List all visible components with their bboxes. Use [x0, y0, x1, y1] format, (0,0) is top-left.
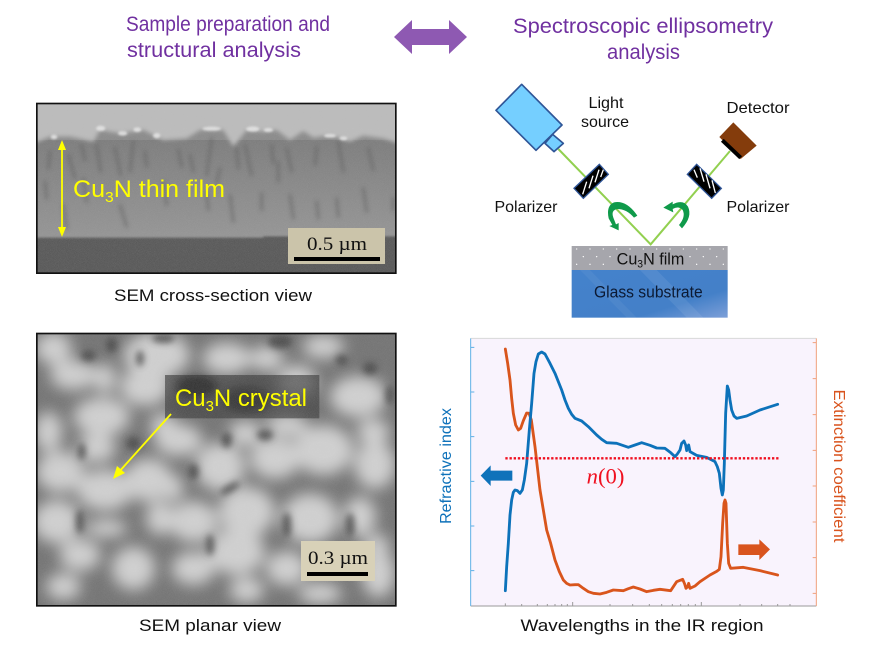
scale bar: 0.3 um: [301, 541, 375, 581]
label: n(0): n(0): [587, 464, 624, 489]
label: left polarizer: Polarizer: [494, 199, 558, 216]
panel: SEM cross-section image: [36, 102, 397, 274]
bright grain tips: [51, 126, 347, 140]
panel: SEM planar image: [33, 332, 396, 606]
arrow: blue, left axis: [481, 465, 512, 486]
axis title: extinction coefficient: Extinction coefficient: [830, 390, 847, 543]
label: Cu3N thin film: N thin film: [114, 176, 225, 203]
title: spectroscopic ellipsometry analysis: Spectroscopic ellipsometry: [513, 15, 774, 38]
icon: right rotation arrow: [663, 202, 689, 228]
film top edge: [38, 104, 395, 147]
frame: [37, 103, 396, 273]
layer: Cu3N film: Cu: [617, 250, 638, 269]
arrow: orange, right axis: [738, 539, 770, 560]
light beam: [558, 149, 730, 244]
axes: [471, 338, 816, 606]
title: sample preparation and structural analysis: Sample preparation and: [126, 13, 330, 36]
axis title: refractive index: Refractive index: [438, 408, 455, 524]
layer: Cu3N film: 3: [637, 259, 643, 271]
line: n(0) reference: [505, 455, 779, 462]
scale bar: 0.5 um: 0.5 µm: [307, 234, 367, 255]
caption: SEM planar view: SEM planar view: [139, 616, 282, 635]
label: right polarizer: Polarizer: [726, 199, 790, 216]
substrate: [38, 235, 395, 272]
arrow: double-headed purple: [394, 20, 467, 54]
label: Cu3N crystal: Cu: [175, 385, 206, 412]
layer: Cu3N film: [572, 246, 728, 271]
curve: refractive index: [505, 352, 778, 591]
title: spectroscopic ellipsometry analysis: analysis: [607, 41, 680, 64]
frame: [37, 333, 396, 606]
film columns: [45, 138, 393, 228]
icon: detector: [719, 122, 757, 159]
dark valleys: [76, 334, 394, 556]
arrow: crystal pointer: [113, 414, 171, 479]
axis title: wavelengths: Wavelengths in the IR region: [520, 616, 764, 635]
title: sample preparation and structural analysis: structural analysis: [127, 39, 301, 62]
icon: right polarizer: [687, 164, 721, 198]
label: Cu3N crystal: N crystal: [214, 385, 307, 412]
caption: SEM cross-section view: SEM cross-section view: [114, 286, 313, 305]
label: Cu3N crystal: 3: [206, 398, 214, 415]
label: Cu3N thin film: Cu: [73, 176, 104, 203]
label: light source: source: [581, 114, 629, 131]
label: detector: Detector: [726, 100, 790, 117]
scale bar: 0.5 um: [288, 228, 385, 264]
crystal grains: [33, 332, 396, 604]
title: spectroscopic ellipsometry analysis: [513, 15, 774, 64]
layer: Cu3N film: N film: [643, 250, 684, 269]
icon: light source: [496, 84, 563, 152]
title: sample preparation and structural analysis: [126, 13, 330, 62]
layer: glass substrate: Glass substrate: [594, 283, 703, 302]
icon: left polarizer: [574, 164, 608, 198]
arrow: film thickness double arrow: [58, 140, 66, 237]
chart: refractive index and extinction coefficient: [471, 338, 816, 606]
plot area: [471, 338, 816, 606]
label: light source: [581, 95, 629, 131]
curve: extinction coefficient: [505, 349, 778, 594]
icon: left rotation arrow: [608, 202, 637, 230]
diagram: spectroscopic ellipsometry setup: [496, 84, 757, 318]
label: Cu3N thin film: 3: [105, 189, 114, 206]
label: light source: Light: [588, 95, 624, 112]
layer: glass substrate: [572, 270, 728, 318]
scale bar: 0.3 um: 0.3 µm: [308, 548, 368, 569]
